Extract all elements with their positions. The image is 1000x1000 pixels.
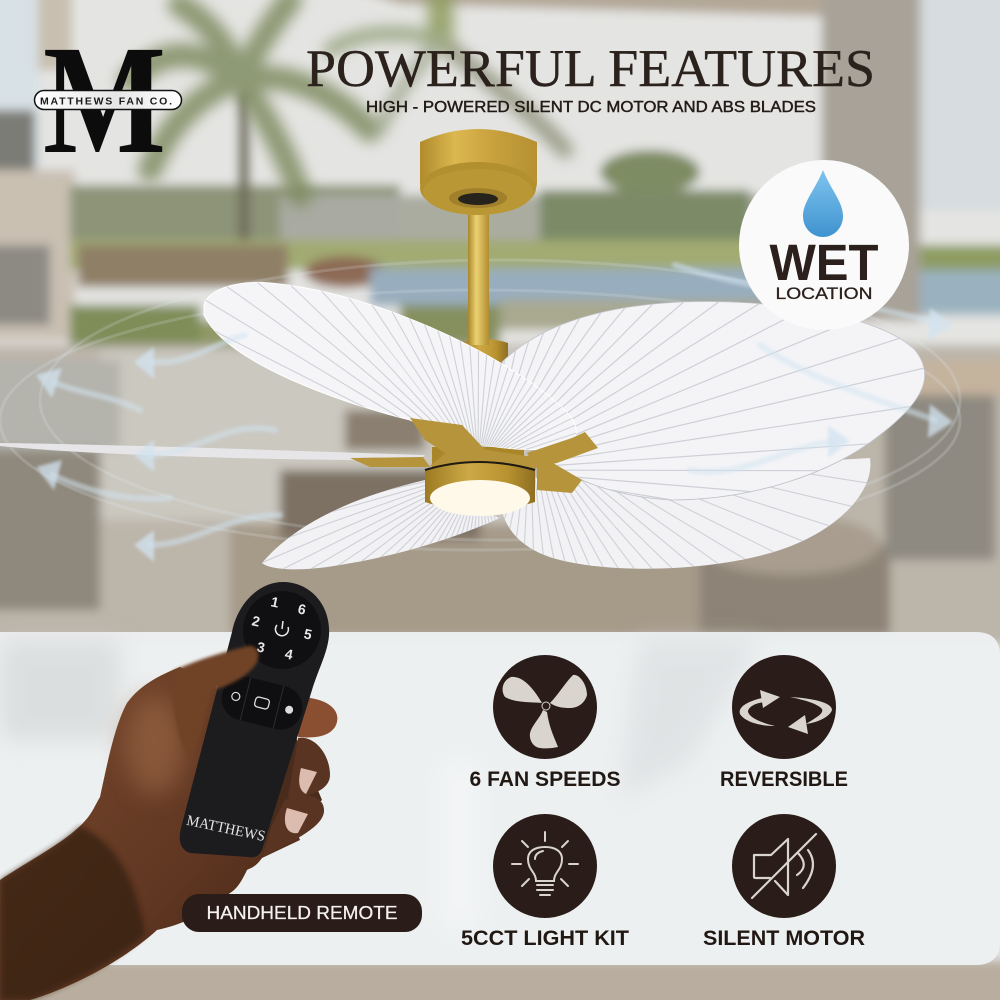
dial numbers: 4 bbox=[284, 645, 295, 663]
bottom feature panel bbox=[0, 632, 1000, 965]
arrow: upper right bbox=[675, 265, 953, 340]
dial numbers: 1 bbox=[270, 593, 281, 611]
arrow: upper left 1 bbox=[134, 335, 245, 379]
arrow: mid right bbox=[760, 345, 953, 438]
arrow: upper left 2 bbox=[36, 368, 140, 410]
downrod collar bbox=[460, 339, 508, 368]
finger: ring bbox=[262, 796, 324, 857]
dial numbers: 3 bbox=[256, 638, 267, 656]
label: reversible: REVERSIBLE bbox=[720, 768, 848, 791]
hand and arm bbox=[0, 667, 300, 1000]
ceiling fan bbox=[0, 129, 926, 570]
knuckle highlight bbox=[125, 695, 185, 795]
button pill bbox=[217, 672, 307, 734]
finger: middle bbox=[288, 738, 330, 798]
title: POWERFUL FEATURES bbox=[306, 40, 875, 98]
label: silent motor: SILENT MOTOR bbox=[703, 927, 865, 950]
icon: reversible arrows bbox=[732, 655, 836, 759]
dial numbers: 5 bbox=[303, 625, 314, 643]
label: 6 fan speeds: 6 FAN SPEEDS bbox=[470, 768, 620, 791]
air flow arrows bbox=[36, 265, 953, 562]
dial numbers bbox=[251, 593, 314, 663]
label: light kit: 5CCT LIGHT KIT bbox=[461, 927, 629, 950]
fan blade: lower right bbox=[502, 458, 870, 569]
arrow: lower left 1 bbox=[36, 460, 170, 499]
motor upper hub bbox=[432, 447, 524, 467]
palm fronds bbox=[130, 0, 565, 195]
LED light bbox=[430, 480, 530, 516]
logo banner bbox=[34, 90, 182, 110]
panel soft shading bbox=[0, 640, 760, 930]
feature: silent motor bbox=[703, 814, 865, 950]
remote control bbox=[180, 582, 329, 857]
arrow: lower left 2 bbox=[134, 515, 280, 562]
motor housing bbox=[425, 461, 535, 511]
finger: index bbox=[298, 697, 337, 737]
icon: muted speaker bbox=[732, 814, 836, 918]
feature: reversible bbox=[720, 655, 848, 791]
fan blade: lower left bbox=[262, 480, 500, 570]
fan blade: upper right bbox=[502, 301, 926, 500]
feature: 6 fan speeds bbox=[470, 655, 620, 791]
location label: LOCATION bbox=[776, 284, 872, 303]
air flow swirl rings bbox=[0, 260, 960, 550]
wet label: WET bbox=[770, 234, 878, 291]
dial numbers: 2 bbox=[251, 612, 262, 630]
fan blade: upper left bbox=[204, 282, 576, 450]
wet location badge bbox=[739, 160, 909, 330]
icon: water drop bbox=[803, 170, 843, 237]
remote label pill bbox=[182, 894, 422, 932]
hand holding remote bbox=[0, 582, 337, 1000]
downrod bbox=[468, 200, 489, 345]
arrow: center right bbox=[690, 425, 850, 472]
icon: fan bbox=[493, 655, 597, 759]
thumb bbox=[172, 646, 258, 760]
feature: light kit bbox=[461, 814, 629, 950]
canopy bbox=[420, 129, 537, 215]
dial numbers: 6 bbox=[297, 600, 308, 618]
subtitle: HIGH - POWERED SILENT DC MOTOR AND ABS BLADES bbox=[366, 99, 816, 116]
blade brackets bbox=[350, 418, 598, 493]
wrist shadow bbox=[0, 826, 145, 1000]
arrow: mid left bbox=[134, 428, 275, 472]
icon: power bbox=[275, 621, 288, 636]
fingers base bbox=[262, 735, 322, 857]
logo bbox=[34, 14, 182, 187]
remote body bbox=[180, 582, 329, 857]
logo banner: MATTHEWS FAN CO. bbox=[40, 96, 172, 108]
logo letter M: M bbox=[43, 14, 166, 187]
fan blade: edge-on left bbox=[0, 443, 425, 460]
icon: light bulb bbox=[493, 814, 597, 918]
remote brand: MATTHEWS bbox=[185, 813, 267, 845]
remote label pill: HANDHELD REMOTE bbox=[206, 903, 398, 923]
control dial bbox=[243, 591, 321, 669]
